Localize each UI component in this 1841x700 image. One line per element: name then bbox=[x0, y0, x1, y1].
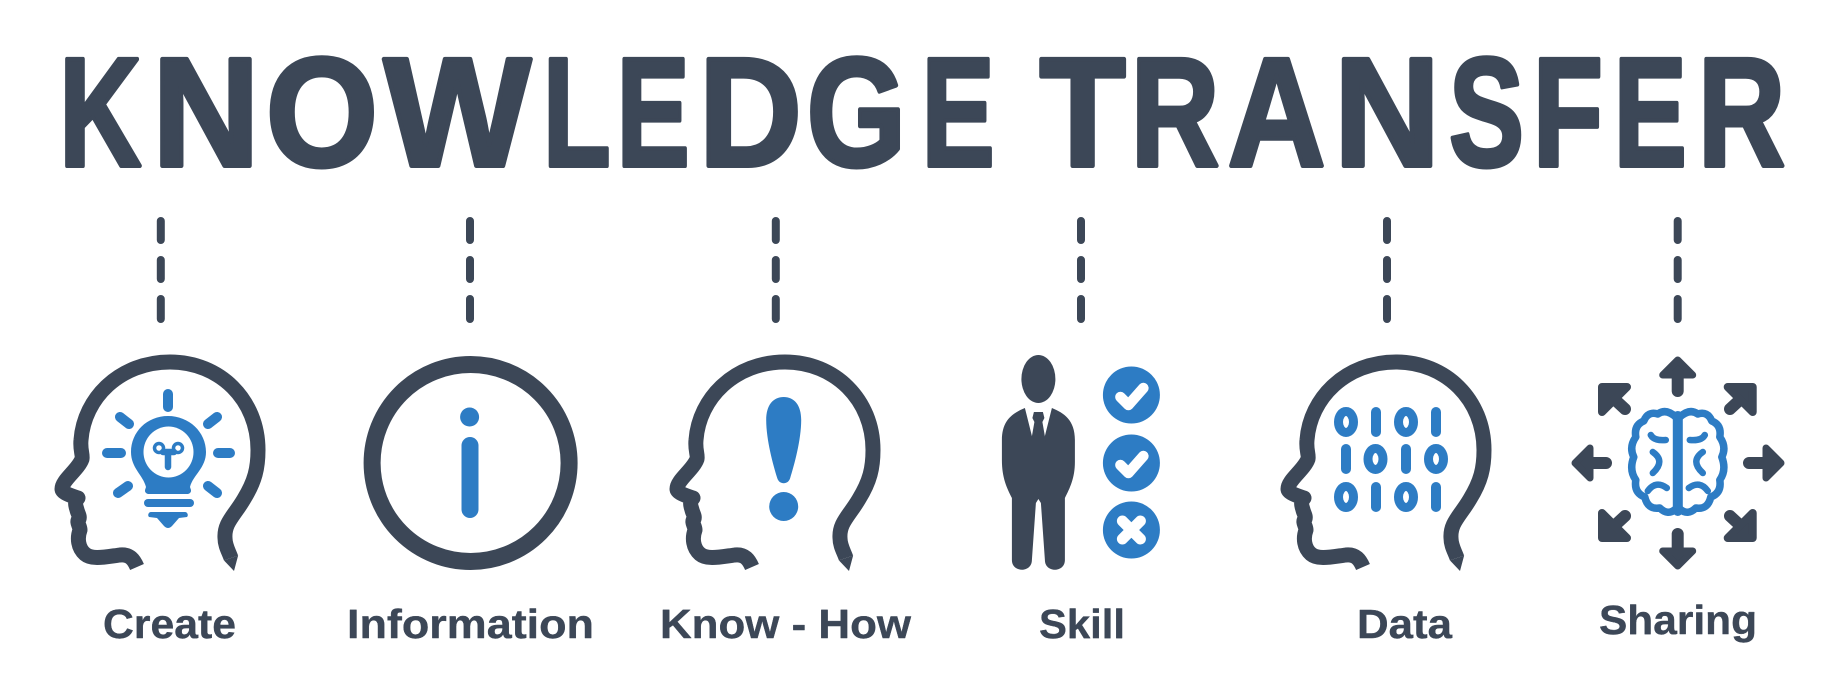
title: K bbox=[59, 26, 141, 199]
title: E bbox=[1614, 26, 1687, 199]
title: G bbox=[807, 26, 906, 199]
dashed connector bbox=[466, 221, 474, 319]
title: R bbox=[1131, 26, 1219, 199]
column: Sharing bbox=[1575, 221, 1781, 643]
dashed connector bbox=[157, 221, 165, 319]
icon: head with binary digits bbox=[1288, 362, 1484, 571]
title: D bbox=[699, 26, 802, 199]
arrows bbox=[1575, 360, 1781, 566]
label: Skill: Skill bbox=[1039, 601, 1125, 647]
title: R bbox=[1698, 26, 1785, 199]
column: Data bbox=[1288, 221, 1484, 647]
icon: head with light bulb bbox=[62, 362, 258, 571]
title: T bbox=[1040, 26, 1126, 199]
icon: head with exclamation mark bbox=[677, 362, 873, 571]
label: Create: Create bbox=[103, 601, 236, 647]
binary digits bbox=[1338, 407, 1444, 512]
brain bbox=[1632, 412, 1724, 512]
title: W bbox=[384, 26, 532, 199]
label: Sharing: Sharing bbox=[1599, 597, 1757, 643]
dashed connector bbox=[1077, 221, 1085, 319]
exclamation mark bbox=[766, 397, 801, 521]
title: A bbox=[1228, 26, 1326, 199]
column: Know-How bbox=[660, 221, 911, 647]
label: Information: Information bbox=[347, 601, 594, 647]
title: F bbox=[1533, 26, 1603, 199]
light rays bbox=[107, 394, 230, 493]
title: E bbox=[922, 26, 995, 199]
label: Know - How: Know - How bbox=[660, 601, 911, 647]
head outline bbox=[677, 362, 873, 571]
light bulb bbox=[131, 416, 206, 528]
title: E bbox=[617, 26, 690, 199]
title: L bbox=[543, 26, 611, 199]
icon: businessman with checklist bbox=[1002, 355, 1160, 570]
head outline bbox=[1288, 362, 1484, 571]
icon: brain with radiating arrows bbox=[1575, 360, 1781, 566]
icon: information circle bbox=[372, 364, 569, 562]
dashed connector bbox=[1383, 221, 1391, 319]
check items bbox=[1103, 366, 1160, 558]
person bbox=[1002, 355, 1075, 570]
column: Create bbox=[62, 221, 258, 647]
dashed connector bbox=[772, 221, 780, 319]
label: Data: Data bbox=[1357, 601, 1453, 647]
head outline bbox=[62, 362, 258, 571]
title: N bbox=[152, 26, 260, 199]
column: Information bbox=[347, 221, 594, 647]
title: N bbox=[1334, 26, 1440, 199]
title: S bbox=[1449, 26, 1524, 199]
title: O bbox=[266, 26, 378, 199]
column: Skill bbox=[1002, 221, 1160, 647]
dashed connector bbox=[1674, 221, 1682, 319]
